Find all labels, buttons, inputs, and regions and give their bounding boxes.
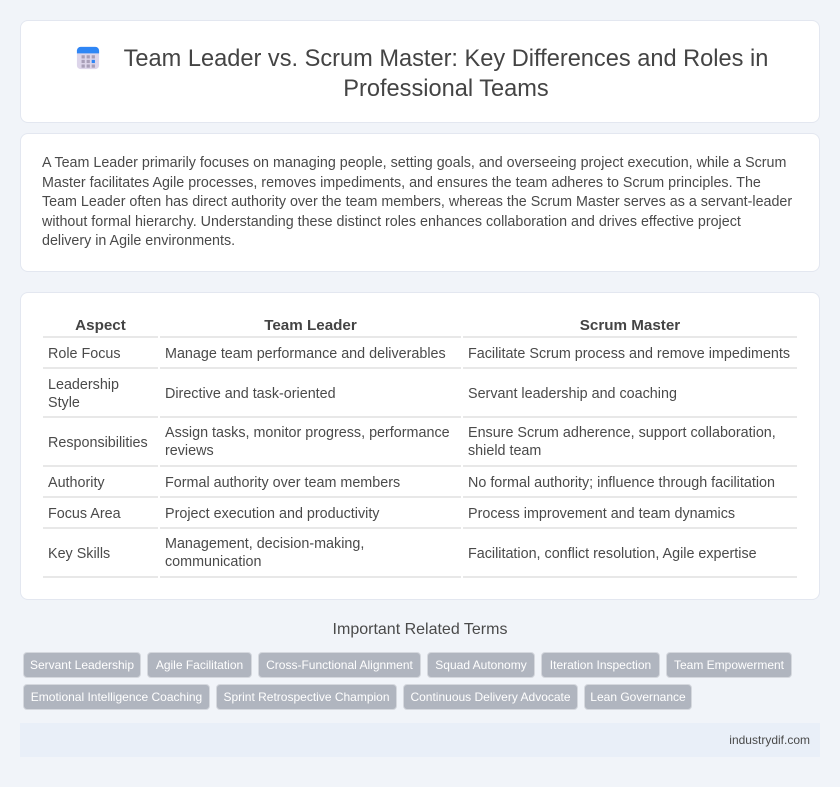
table rows: Facilitate Scrum process and remove impediments <box>468 346 790 362</box>
table rows: Facilitation, conflict resolution, Agile expertise <box>468 546 757 562</box>
summary paragraph <box>42 155 792 249</box>
title <box>124 46 768 102</box>
panel: comparison table <box>20 292 820 600</box>
summary paragraph: Master facilitates Agile processes, removes impediments, and ensures the team adheres to Scrum principles. The <box>42 174 761 190</box>
tag row one <box>23 652 792 678</box>
table rows: Authority <box>48 474 105 490</box>
table header: Scrum Master <box>580 317 680 334</box>
table rows: Directive and task-oriented <box>165 386 336 402</box>
tag row two: Emotional Intelligence Coaching <box>31 690 202 704</box>
icon: calendar <box>76 46 100 70</box>
tag row two: Lean Governance <box>590 690 686 704</box>
tag list <box>23 652 792 710</box>
tag row two: Sprint Retrospective Champion <box>223 690 390 704</box>
panel: header <box>20 20 820 123</box>
table rows: Project execution and productivity <box>165 506 379 522</box>
table rows: Formal authority over team members <box>165 474 400 490</box>
table rows: No formal authority; influence through facilitation <box>468 474 775 490</box>
tag row two <box>23 684 692 710</box>
summary paragraph: Team Leader often has direct authority over the team members, whereas the Scrum Master serves as a servant-leader <box>42 194 792 210</box>
table rows: Leadership <box>48 376 119 392</box>
table rows: Ensure Scrum adherence, support collaboration, <box>468 425 776 441</box>
heading: important related terms: Important Related Terms <box>333 621 507 638</box>
tag row one: Team Empowerment <box>674 658 784 672</box>
summary paragraph: delivery in Agile environments. <box>42 233 235 249</box>
tag row one: Servant Leadership <box>30 658 134 672</box>
table header <box>75 317 680 334</box>
comparison table <box>43 317 797 578</box>
table rows: reviews <box>165 443 214 459</box>
table header: Aspect <box>75 317 126 334</box>
table rows <box>43 336 797 578</box>
table rows: Management, decision-making, <box>165 536 364 552</box>
tag row one: Cross-Functional Alignment <box>266 658 413 672</box>
footer <box>20 723 820 757</box>
tag row two: Continuous Delivery Advocate <box>410 690 571 704</box>
table rows: Responsibilities <box>48 434 148 450</box>
table rows: Role Focus <box>48 346 121 362</box>
summary paragraph: without formal hierarchy. Understanding these distinct roles enhances collaboration and drives effective project <box>42 214 741 230</box>
summary paragraph: A Team Leader primarily focuses on managing people, setting goals, and overseeing project execution, while a Scrum <box>42 155 786 171</box>
tag row one: Squad Autonomy <box>435 658 527 672</box>
tag row one: Iteration Inspection <box>550 658 651 672</box>
table header: Team Leader <box>264 317 357 334</box>
table rows: Process improvement and team dynamics <box>468 506 735 522</box>
table rows: Style <box>48 394 80 410</box>
table rows: Manage team performance and deliverables <box>165 346 446 362</box>
panel: summary text <box>20 133 820 272</box>
table rows: Focus Area <box>48 506 121 522</box>
table rows: Key Skills <box>48 546 110 562</box>
tag row one: Agile Facilitation <box>156 658 243 672</box>
table rows: Servant leadership and coaching <box>468 386 677 402</box>
table rows: Assign tasks, monitor progress, performance <box>165 425 450 441</box>
table rows: communication <box>165 554 261 570</box>
title: Professional Teams <box>343 76 549 102</box>
title: Team Leader vs. Scrum Master: Key Differences and Roles in <box>124 46 768 72</box>
footer source text: industrydif.com <box>729 733 810 747</box>
table rows: shield team <box>468 443 541 459</box>
